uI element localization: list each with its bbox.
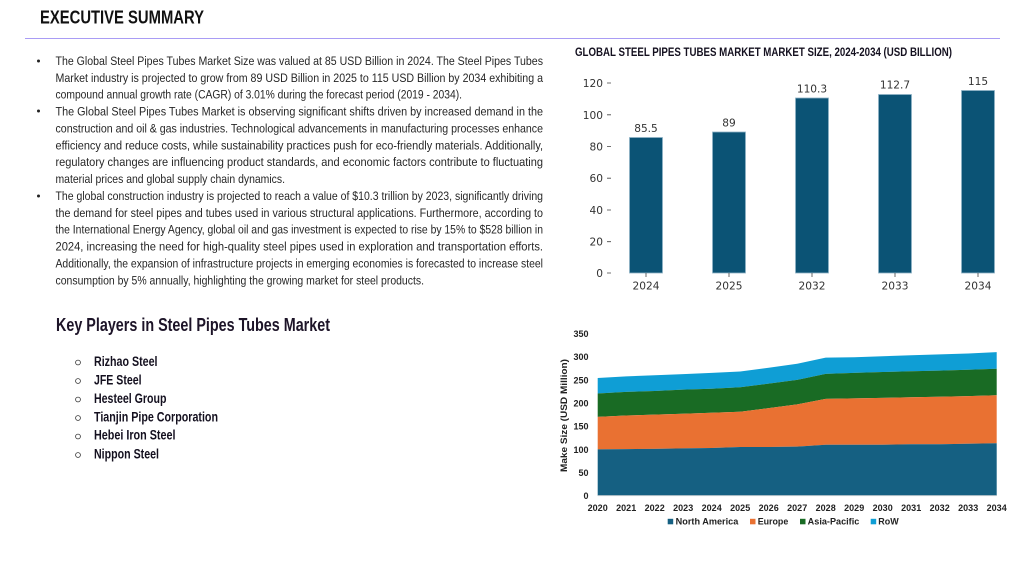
area chart y axis: 50 (578, 468, 588, 478)
bullet paragraph 2: material prices and global supply chain dynamics. (56, 172, 285, 186)
area chart x axis: 2027 (787, 503, 807, 513)
area: RoW (598, 352, 997, 394)
area: North America (598, 443, 997, 496)
area chart legend: RoW (878, 516, 899, 526)
title: EXECUTIVE SUMMARY (40, 6, 205, 28)
bullet paragraph 1: compound annual growth rate (CAGR) of 3.01% during the forecast period (2019 - 2034). (56, 88, 462, 102)
bullet paragraph 2: The Global Steel Pipes Tubes Market is observing significant shifts driven by increased demand in the (56, 104, 543, 118)
bar chart x axis: 2034 (965, 280, 992, 292)
bullet paragraph 3 (37, 189, 543, 288)
bars (630, 90, 994, 273)
bullet paragraph 1: The Global Steel Pipes Tubes Market Size was valued at 85 USD Billion in 2024. The Steel Pipes Tubes (56, 54, 543, 68)
bar chart title: GLOBAL STEEL PIPES TUBES MARKET MARKET SIZE, 2024-2034 (USD BILLION) (575, 45, 952, 59)
bar chart y axis: 80 (590, 142, 603, 154)
area chart legend: Europe (758, 516, 788, 526)
bar chart y axis: 20 (590, 237, 603, 249)
key players heading: Key Players in Steel Pipes Tubes Market (56, 315, 330, 335)
bar value labels: 115 (968, 76, 988, 88)
area chart y axis (573, 329, 588, 501)
area chart y axis: 250 (573, 375, 588, 385)
area chart x axis: 2032 (930, 503, 950, 513)
bullet paragraph 3: the demand for steel pipes and tubes used in various structural applications. Furthermore, according to (56, 206, 543, 220)
bar value labels: 112.7 (880, 80, 910, 92)
key players list: Tianjin Pipe Corporation (94, 410, 218, 424)
area chart x axis: 2031 (901, 503, 921, 513)
area chart y axis: 200 (573, 398, 588, 408)
key players list: Rizhao Steel (94, 354, 158, 369)
bullet paragraph 1: Market industry is projected to grow from 89 USD Billion in 2025 to 115 USD Billion by 2034 exhibiting a (56, 71, 543, 85)
panel: regional stacked area chart (559, 329, 1007, 526)
bar value labels: 89 (722, 118, 736, 130)
area chart x axis: 2029 (844, 503, 864, 513)
area: Asia-Pacific (598, 369, 997, 417)
area chart x axis: 2028 (816, 503, 836, 513)
area: Europe (598, 395, 997, 449)
area chart y axis: 350 (573, 329, 588, 339)
bar value labels: 85.5 (634, 123, 658, 135)
panel: market size bar chart (575, 45, 994, 292)
bullet paragraph 2: construction and oil & gas industries. Technological advancements in manufacturing processes enhance (56, 122, 543, 136)
bullet paragraph 3: Additionally, the expansion of infrastructure projects in emerging economies is forecasted to increase steel (56, 256, 543, 270)
area chart x axis: 2025 (730, 503, 750, 513)
bar chart y axis: 120 (583, 78, 603, 90)
panel: key players (56, 315, 330, 462)
area chart x axis: 2030 (873, 503, 893, 513)
bar value labels (634, 76, 988, 135)
bar chart y axis: 100 (583, 110, 603, 122)
bar chart x axis (633, 273, 992, 292)
bullet paragraph 3: The global construction industry is projected to reach a value of $10.3 trillion by 2023, significantly driving (56, 189, 543, 203)
area chart x axis: 2021 (616, 503, 636, 513)
area chart x axis: 2023 (673, 503, 693, 513)
area chart x axis: 2024 (702, 503, 722, 513)
area chart x axis (588, 496, 1007, 513)
bullet paragraph 3: 2024, increasing the need for high-quality steel pipes used in exploration and transportation efforts. (56, 240, 543, 254)
area chart y axis: 300 (573, 352, 588, 362)
summary bullet list (37, 54, 543, 288)
area chart y axis: 0 (583, 491, 588, 501)
area chart x axis: 2033 (958, 503, 978, 513)
bar chart x axis: 2033 (882, 280, 908, 292)
area chart x axis: 2020 (588, 503, 608, 513)
bullet paragraph 2: regulatory changes are influencing product standards, and economic factors contribute to fluctuating (56, 155, 543, 169)
bar chart y axis: 60 (590, 173, 603, 185)
key players list: JFE Steel (94, 372, 142, 388)
area chart legend: Asia-Pacific (808, 516, 859, 526)
key players list: Nippon Steel (94, 446, 159, 462)
area chart legend: North America (676, 516, 739, 526)
key players list (76, 354, 218, 462)
area chart y axis title: Make Size (USD Million) (559, 359, 569, 472)
area chart x axis: 2022 (645, 503, 665, 513)
bar chart y axis: 40 (590, 205, 603, 217)
bullet paragraph 1 (37, 54, 543, 102)
key players list: Hesteel Group (94, 391, 166, 406)
bullet paragraph 2: efficiency and reduce costs, while sustainability practices push for eco-friendly materials. Additionally, (56, 138, 543, 152)
bar chart y axis (583, 78, 611, 280)
bullet paragraph 3: consumption by 5% annually, highlighting the growing market for steel products. (56, 274, 424, 288)
area chart x axis: 2026 (759, 503, 779, 513)
bar chart x axis: 2032 (799, 280, 825, 292)
bar value labels: 110.3 (797, 84, 827, 96)
stacked areas (598, 352, 997, 496)
area chart legend (668, 516, 899, 526)
area chart y axis: 100 (573, 445, 588, 455)
key players list: Hebei Iron Steel (94, 428, 176, 442)
bullet paragraph 2 (37, 104, 543, 186)
bar chart x axis: 2024 (633, 280, 660, 292)
bar chart x axis: 2025 (716, 280, 742, 292)
area chart y axis: 150 (573, 422, 588, 432)
bullet paragraph 3: the International Energy Agency, global oil and gas investment is expected to rise by 15% to $528 billion in (56, 222, 543, 236)
bar chart y axis: 0 (596, 268, 603, 280)
area chart x axis: 2034 (987, 503, 1007, 513)
